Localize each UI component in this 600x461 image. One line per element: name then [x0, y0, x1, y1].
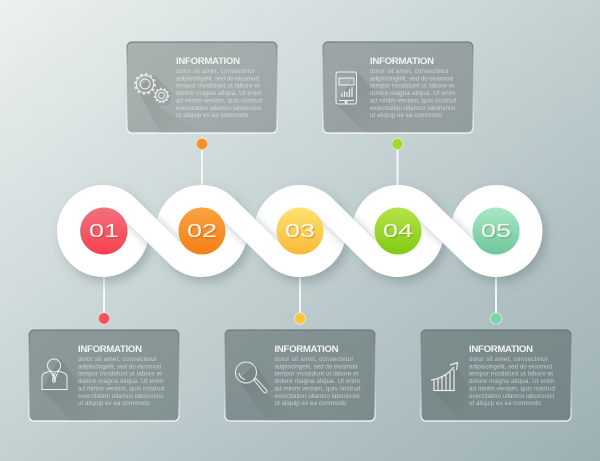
step 03: 03 — [286, 222, 316, 242]
body text: ad minim veniam, quis nostrud — [176, 97, 262, 104]
heading: INFORMATION — [274, 344, 339, 355]
body text: ad minim veniam, quis nostrud — [274, 385, 361, 392]
connector: top left — [201, 150, 203, 188]
body text: tempor incididunt ut labore et — [469, 371, 553, 378]
step 05: 05 — [482, 222, 512, 242]
body text: exercitation ullamco laborisnisi — [78, 393, 163, 400]
body text: adipiscingelit, sed do eiusmod — [469, 363, 552, 370]
connector: bottom 03 — [299, 275, 301, 315]
body text: dolor sit amet, consectetur — [469, 356, 548, 363]
body text: ut aliquip ex ea commodo — [176, 112, 248, 119]
step 02: 02 — [187, 221, 217, 241]
step 01: 01 — [89, 221, 119, 241]
panel: bottom left, person — [29, 330, 179, 421]
body text: exercitation ullamco laborisnisi — [469, 393, 554, 400]
icon: magnifier — [236, 362, 267, 393]
panel: top right, tablet — [323, 42, 473, 133]
body text: adipiscingelit, sed do eiusmod — [78, 363, 161, 370]
body text: tempor incididunt ut labore et — [370, 83, 454, 90]
body text: ad minim veniam, quis nostrud — [78, 385, 164, 392]
body text — [370, 68, 456, 119]
body text: ut aliquip ex ea commodo — [370, 112, 442, 119]
body text: adipiscingelit, sed do eiusmod — [274, 363, 358, 370]
dot: orange — [196, 138, 208, 150]
body text: dolore magna aliqua. Ut enim — [176, 90, 262, 97]
ribbon: white linked rings — [68, 196, 531, 266]
body text: dolore magna aliqua. Ut enim — [274, 378, 360, 385]
step 04: 04 — [384, 222, 414, 242]
step 04 — [374, 208, 422, 254]
step 03: 03 — [285, 221, 315, 241]
dot: green — [392, 138, 403, 150]
icon: rising bar chart — [431, 362, 458, 390]
body text: dolore magna aliqua. Ut enim — [469, 378, 554, 385]
icon: person — [42, 359, 67, 390]
heading: INFORMATION — [370, 56, 434, 67]
body text — [274, 356, 361, 407]
dot: yellow — [294, 313, 306, 324]
step 05: 05 — [481, 221, 511, 241]
panel: top left, gears — [127, 42, 277, 133]
body text — [469, 356, 555, 407]
step 04: 04 — [383, 221, 413, 241]
step 01: 01 — [90, 222, 120, 242]
body text: ad minim veniam, quis nostrud — [469, 385, 555, 392]
step 02: 02 — [188, 222, 218, 242]
step 03 — [276, 208, 324, 254]
body text: tempor incididunt ut labore et — [176, 83, 260, 90]
step 05 — [472, 208, 520, 254]
heading: INFORMATION — [469, 344, 533, 355]
body text: dolor sit amet, consectetur — [370, 68, 449, 75]
body text — [78, 356, 164, 407]
connector: bottom 05 — [495, 275, 497, 315]
panel: bottom right, growth chart — [421, 330, 571, 421]
step 02 — [178, 208, 226, 254]
body text: dolor sit amet, consectetur — [78, 356, 157, 363]
body text: dolore magna aliqua. Ut enim — [78, 378, 164, 385]
connector: bottom 01 — [103, 275, 105, 315]
body text: exercitation ullamco laborisnisi — [370, 105, 455, 112]
body text: adipiscingelit, sed do eiusmod — [176, 75, 259, 82]
body text: exercitation ullamco laborisnisi — [176, 105, 261, 112]
heading: INFORMATION — [78, 344, 142, 355]
body text: ad minim veniam, quis nostrud — [370, 97, 456, 104]
body text — [176, 68, 262, 119]
dot: teal — [490, 313, 502, 324]
ribbon drop shadow — [61, 190, 546, 282]
step 01 — [80, 208, 128, 254]
body text: tempor incididunt ut labore et — [78, 371, 162, 378]
body text: dolore magna aliqua. Ut enim — [370, 90, 456, 97]
body text: exercitation ullamco laborisnisi — [274, 393, 360, 400]
body text: ut aliquip ex ea commodo — [78, 400, 150, 407]
body text: tempor incididunt ut labore et — [274, 371, 359, 378]
body text: dolor sit amet, consectetur — [274, 356, 354, 363]
connector: top right — [396, 150, 398, 188]
dot: red — [98, 313, 110, 324]
body text: dolor sit amet, consectetur — [176, 68, 255, 75]
body text: ut aliquip ex ea commodo — [469, 400, 541, 407]
body text: adipiscingelit, sed do eiusmod — [370, 75, 453, 82]
heading: INFORMATION — [176, 56, 240, 67]
icon: tablet — [336, 72, 356, 104]
panel: bottom middle, magnifier — [225, 330, 375, 421]
icon: gears — [135, 74, 168, 102]
body text: ut aliquip ex ea commodo — [274, 400, 347, 407]
